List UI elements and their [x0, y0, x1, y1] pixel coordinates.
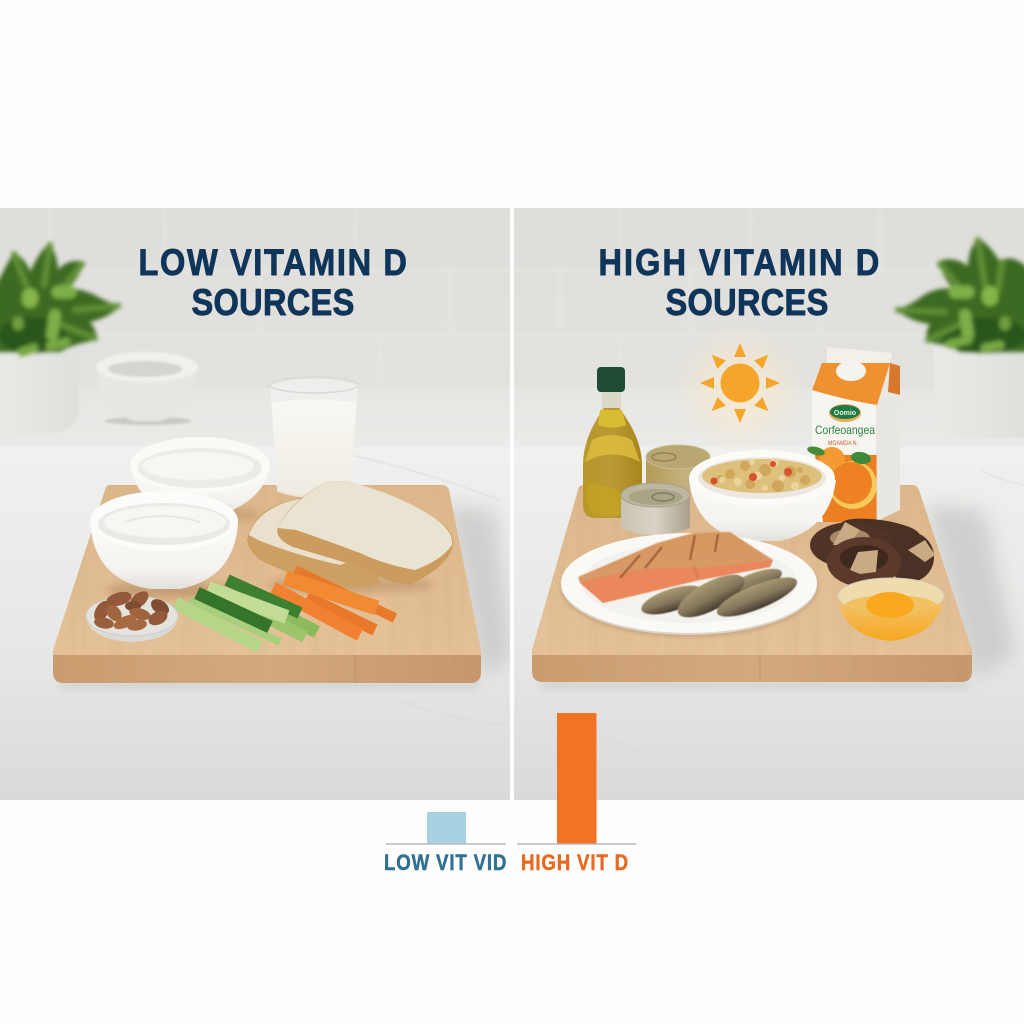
celery and cucumber sticks — [175, 580, 317, 647]
heading: low vitamin D sources: LOW VITAMIN D — [138, 242, 407, 283]
glass bowl with egg yolk — [838, 578, 944, 641]
panel: low vitamin D sources — [0, 208, 512, 800]
wooden cutting board — [53, 485, 512, 690]
panel: high vitamin D sources — [514, 208, 1024, 800]
carton of fortified orange juice: Corfeoangea — [815, 423, 875, 437]
heading: low vitamin D sources — [140, 248, 406, 316]
wooden cutting board — [532, 485, 1015, 690]
carton of fortified orange juice: Oomio — [834, 410, 856, 417]
heading: low vitamin D sources: SOURCES — [192, 282, 354, 323]
heading: high vitamin D sources — [600, 248, 878, 316]
label: high vit D: HIGH VIT D — [521, 852, 628, 875]
label: low vit D: LOW VIT VID — [384, 852, 506, 875]
plant in white pot — [0, 243, 120, 433]
grilled salmon fillet — [578, 532, 773, 603]
back bowl of yogurt — [130, 437, 270, 523]
dish of almonds — [86, 588, 178, 642]
heading: high vitamin D sources: SOURCES — [666, 282, 828, 323]
bar: low vitamin D — [427, 812, 466, 844]
glass of milk — [270, 377, 358, 498]
kitchen background — [0, 208, 510, 800]
carrot sticks — [273, 570, 395, 635]
kitchen background — [514, 208, 1024, 800]
carton of fortified orange juice: MOAMDA N. — [828, 440, 858, 447]
slices of bread — [247, 481, 453, 593]
bar: high vitamin D — [557, 713, 596, 844]
plate — [561, 533, 817, 637]
plant in white pot — [896, 238, 1024, 438]
front tin can — [621, 483, 690, 535]
bar chart: vitamin D comparison — [384, 713, 636, 875]
carton of fortified orange juice — [806, 347, 900, 522]
bowl of fortified cereal — [689, 450, 836, 541]
sardines — [640, 568, 798, 618]
shiitake mushrooms — [810, 515, 935, 587]
back tin can — [646, 444, 710, 492]
heading: high vitamin D sources: HIGH VITAMIN D — [598, 242, 879, 283]
icon: sun — [699, 343, 780, 434]
bottle of olive oil — [583, 367, 642, 518]
background white bowl — [96, 352, 198, 425]
infographic: low vs high vitamin D sources — [0, 208, 1024, 870]
front bowl of yogurt — [90, 491, 238, 598]
